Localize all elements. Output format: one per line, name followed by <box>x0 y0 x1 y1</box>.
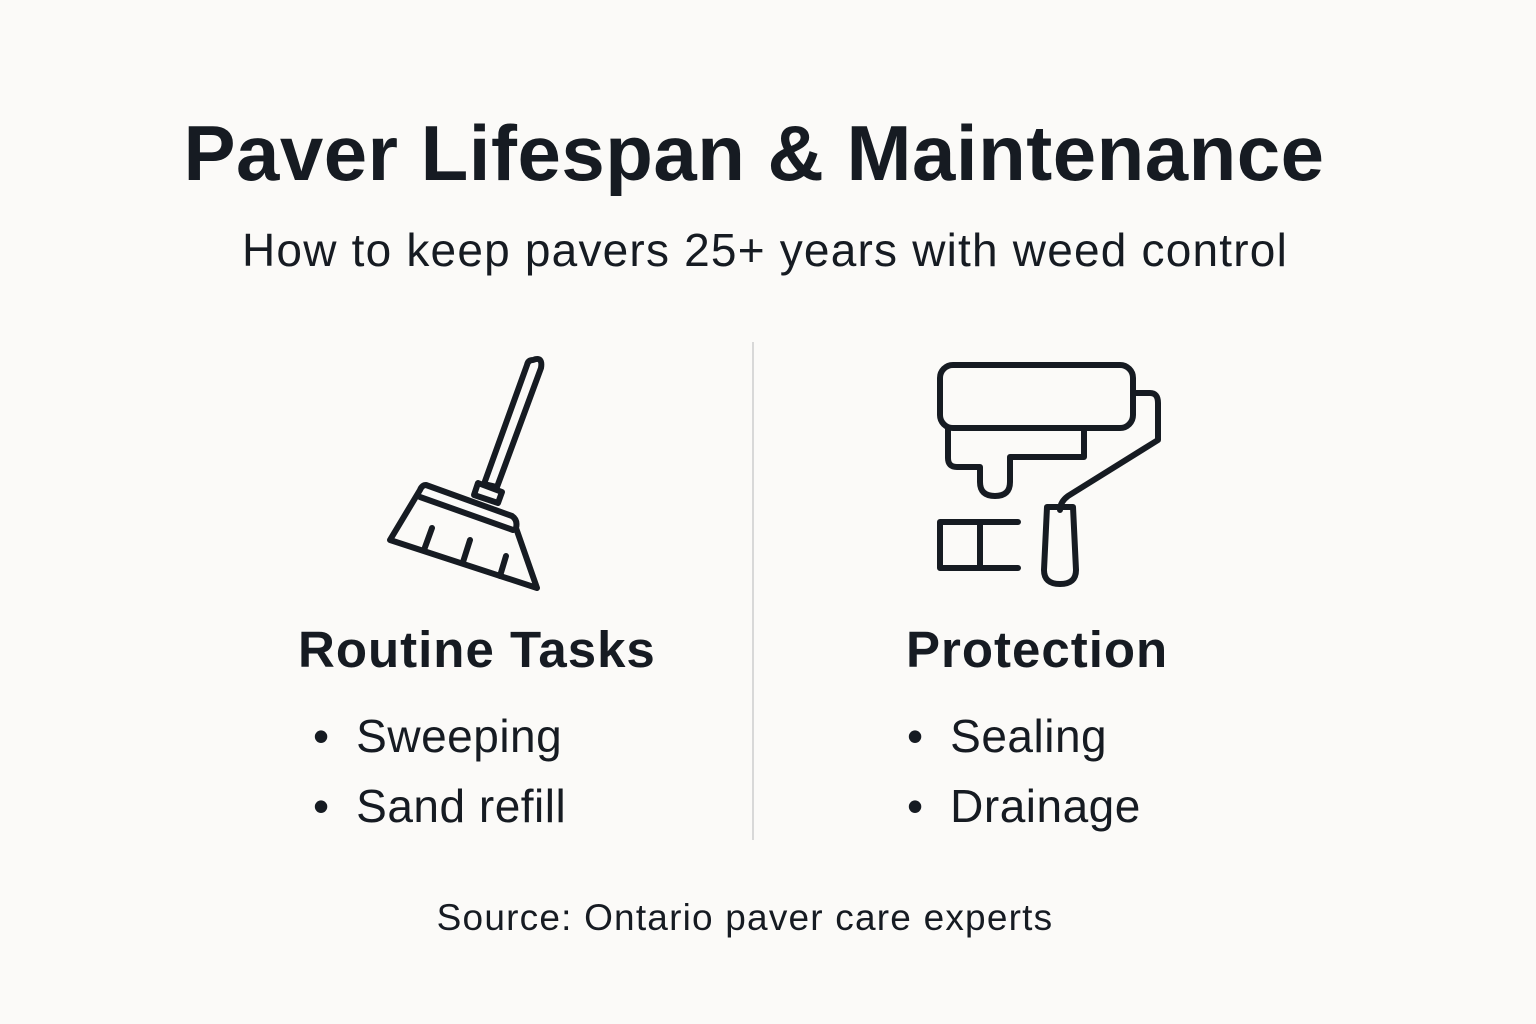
subtitle: How to keep pavers 25+ years with weed control <box>242 224 1288 276</box>
list: routine tasks <box>313 710 566 832</box>
list: protection: • Drainage <box>907 780 1141 832</box>
list: protection <box>907 710 1141 832</box>
list: routine tasks: • Sand refill <box>313 780 566 832</box>
source note: Source: Ontario paver care experts <box>437 897 1053 938</box>
list: protection: • Sealing <box>907 710 1107 762</box>
divider <box>752 342 754 840</box>
list: routine tasks: • Sweeping <box>313 710 562 762</box>
title: Paver Lifespan & Maintenance <box>183 109 1325 197</box>
heading: Protection: Protection <box>906 621 1168 678</box>
heading: Routine Tasks: Routine Tasks <box>298 621 656 678</box>
